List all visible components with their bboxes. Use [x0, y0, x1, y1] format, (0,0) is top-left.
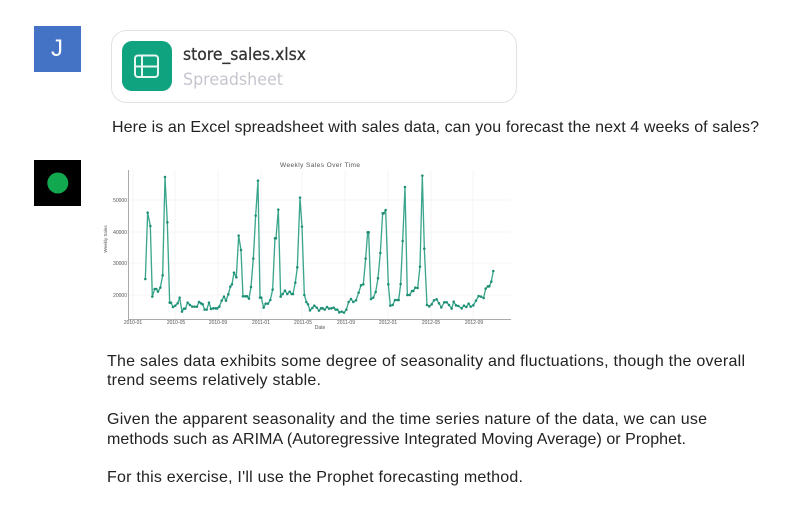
y axis labels	[113, 198, 127, 299]
response paragraph 2: Given the apparent seasonality and the time series nature of the data, we can use	[107, 411, 707, 428]
response paragraph 2	[107, 411, 707, 448]
x axis labels: 2012-01	[379, 320, 397, 326]
x axis labels: 2010-05	[167, 320, 185, 326]
y axis labels: 30000	[113, 261, 127, 267]
x axis labels: 2011-01	[252, 320, 270, 326]
user message: Here is an Excel spreadsheet with sales data, can you forecast the next 4 weeks of sales?	[112, 119, 759, 136]
line chart: weekly sales over time	[103, 162, 511, 331]
response paragraph 3: For this exercise, I'll use the Prophet forecasting method.	[107, 469, 523, 486]
x axis labels: 2010-09	[209, 320, 227, 326]
y axis title: Weekly Sales	[103, 225, 108, 253]
x axis labels: 2011-05	[294, 320, 312, 326]
x axis labels: 2012-09	[465, 320, 483, 326]
axes	[128, 170, 511, 320]
file attachment card	[112, 30, 516, 102]
user avatar: J	[51, 35, 63, 62]
x axis title: Date	[315, 325, 325, 331]
response paragraph 1: The sales data exhibits some degree of seasonality and fluctuations, though the overall	[107, 353, 745, 370]
response paragraph 2: methods such as ARIMA (Autoregressive Integrated Moving Average) or Prophet.	[107, 431, 686, 448]
x axis labels: 2011-09	[337, 320, 355, 326]
response paragraph 1	[107, 353, 745, 389]
y axis labels: 40000	[113, 230, 127, 236]
response paragraph 1: trend seems relatively stable.	[107, 372, 321, 389]
x axis labels: 2010-01	[124, 320, 142, 326]
file name: store_sales.xlsx	[183, 45, 306, 65]
x axis labels	[124, 320, 483, 326]
chart title: Weekly Sales Over Time	[280, 162, 360, 169]
file type: Spreadsheet	[183, 70, 284, 89]
sales line	[145, 176, 493, 313]
assistant avatar	[34, 160, 81, 206]
y axis labels: 50000	[113, 198, 127, 204]
user avatar	[34, 26, 81, 72]
gridlines	[129, 170, 511, 319]
x axis labels: 2012-05	[422, 320, 440, 326]
icon: spreadsheet	[122, 41, 172, 91]
y axis labels: 20000	[113, 293, 127, 299]
